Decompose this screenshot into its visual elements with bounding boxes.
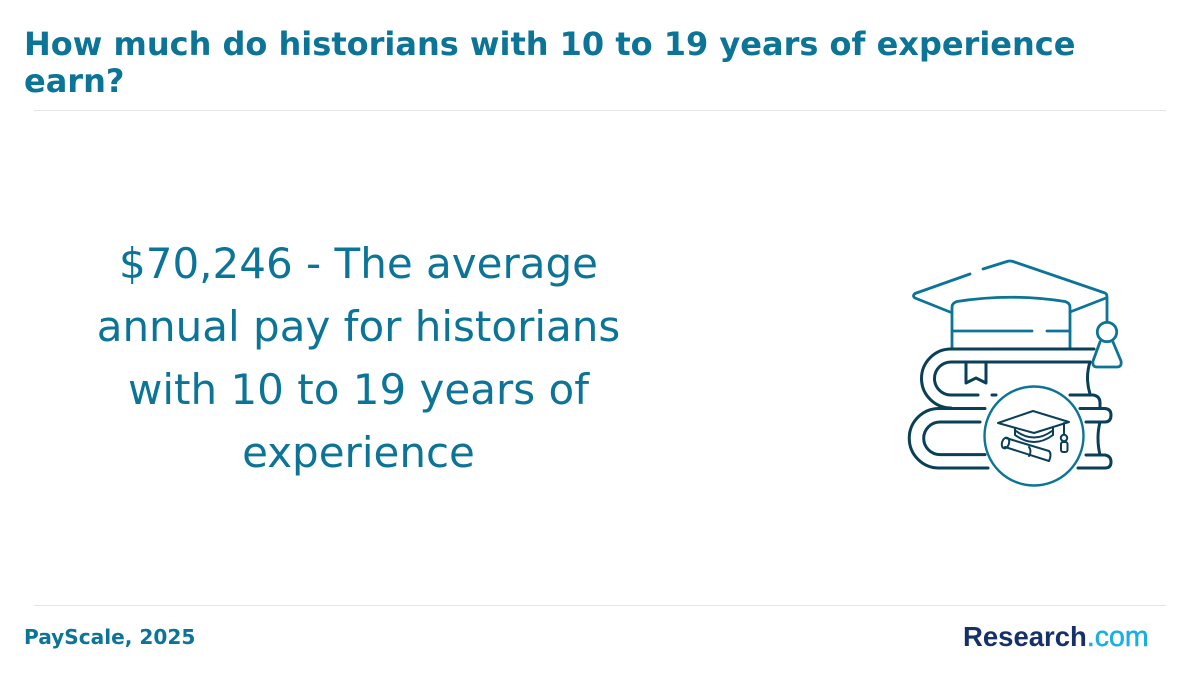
- icon: circle badge: [984, 386, 1084, 486]
- statistic text: $70,246 - The average: [119, 239, 598, 288]
- title: How much do historians with 10 to 19 years of experience earn?: [24, 24, 1075, 100]
- statistic text: [97, 239, 620, 477]
- statistic text: with 10 to 19 years of: [128, 365, 589, 414]
- icon: stacked books: [909, 349, 1111, 468]
- logo: Research.com: [963, 621, 1149, 653]
- icon: graduation cap: [914, 261, 1121, 367]
- source: PayScale, 2025: [24, 624, 195, 648]
- statistic text: experience: [242, 428, 475, 477]
- statistic text: annual pay for historians: [97, 302, 620, 351]
